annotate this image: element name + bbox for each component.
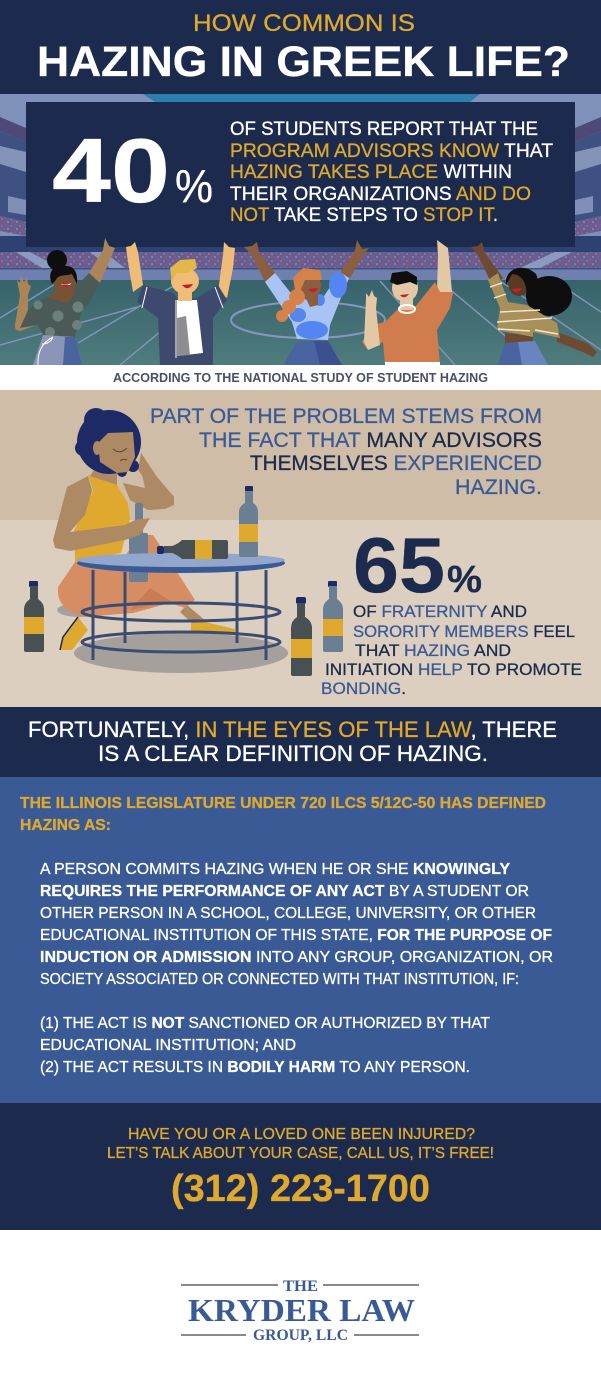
banner: definition heading: FORTUNATELY, IN THE EYES OF THE LAW, THERE bbox=[28, 717, 557, 742]
definition text: SOCIETY ASSOCIATED OR CONNECTED WITH THAT INSTITUTION, IF: bbox=[40, 971, 519, 988]
header banner bbox=[0, 0, 601, 92]
bonding statistic text: INITIATION HELP TO PROMOTE bbox=[325, 660, 582, 679]
banner: definition heading bbox=[0, 707, 601, 777]
definition text: REQUIRES THE PERFORMANCE OF ANY ACT BY A STUDENT OR bbox=[40, 883, 529, 900]
advisors text bbox=[150, 405, 542, 499]
big number 40 percent bbox=[52, 121, 213, 222]
phone number: (312) 223-1700 bbox=[171, 1168, 430, 1210]
statute heading bbox=[20, 795, 546, 834]
definition text bbox=[40, 861, 553, 1076]
bottle: floor right bbox=[323, 581, 343, 652]
source caption bbox=[0, 365, 601, 390]
big number 65 percent: % bbox=[447, 559, 482, 601]
panel: 40 percent statistic bbox=[26, 102, 575, 247]
illustration: woman at table with bottles bbox=[24, 408, 343, 676]
person: woman in striped top bbox=[471, 242, 597, 365]
statistic text: HAZING TAKES PLACE WITHIN bbox=[230, 161, 512, 183]
call to action text: HAVE YOU OR A LOVED ONE BEEN INJURED? bbox=[128, 1126, 475, 1143]
bonding statistic text: SORORITY MEMBERS FEEL bbox=[353, 622, 575, 641]
bonding statistic text: THAT HAZING AND bbox=[355, 641, 511, 660]
panel: stadium hero bbox=[0, 92, 601, 365]
definition text: A PERSON COMMITS HAZING WHEN HE OR SHE KNOWINGLY bbox=[40, 861, 510, 878]
statute heading: HAZING AS: bbox=[20, 817, 111, 834]
definition text: (2) THE ACT RESULTS IN BODILY HARM TO ANY PERSON. bbox=[40, 1059, 470, 1076]
logo: The Kryder Law Group bbox=[0, 1230, 601, 1389]
person: man in orange shirt bbox=[362, 240, 453, 365]
panel: legal definition bbox=[0, 777, 601, 1103]
bottle: floor front bbox=[291, 597, 312, 676]
call to action text: LET’S TALK ABOUT YOUR CASE, CALL US, IT’S FREE! bbox=[107, 1145, 494, 1162]
advisors text: PART OF THE PROBLEM STEMS FROM bbox=[150, 405, 542, 428]
table top bbox=[77, 553, 285, 573]
advisors text: THEMSELVES EXPERIENCED bbox=[250, 452, 542, 475]
bottle: on table lying bbox=[157, 540, 228, 559]
stadium background bbox=[0, 92, 601, 365]
big number 65 percent bbox=[353, 521, 482, 609]
logo: The Kryder Law Group: KRYDER LAW bbox=[188, 1292, 415, 1328]
big number 40 percent: % bbox=[175, 160, 213, 212]
definition text: EDUCATIONAL INSTITUTION; AND bbox=[40, 1037, 296, 1054]
bonding statistic text: OF FRATERNITY AND bbox=[353, 602, 527, 621]
bonding statistic text: BONDING. bbox=[321, 679, 406, 698]
statistic text: THEIR ORGANIZATIONS AND DO bbox=[230, 183, 531, 205]
advisors text: HAZING. bbox=[455, 476, 542, 499]
statistic text: NOT TAKE STEPS TO STOP IT. bbox=[230, 204, 498, 226]
definition text: EDUCATIONAL INSTITUTION OF THIS STATE, FOR THE PURPOSE OF bbox=[40, 927, 552, 944]
call to action text bbox=[107, 1126, 494, 1162]
person: blond man in jacket bbox=[126, 242, 235, 365]
panel: call to action bbox=[0, 1103, 601, 1230]
source caption: ACCORDING TO THE NATIONAL STUDY OF STUDENT HAZING bbox=[113, 371, 488, 385]
big number 65 percent: 65 bbox=[353, 521, 445, 609]
advisors text: THE FACT THAT MANY ADVISORS bbox=[199, 429, 542, 452]
person: woman in blue top bbox=[244, 240, 369, 365]
woman bbox=[53, 408, 235, 650]
main title: HAZING IN GREEK LIFE? bbox=[37, 38, 570, 86]
person: woman in polka dot top bbox=[15, 238, 115, 365]
logo: The Kryder Law Group: THE bbox=[283, 1278, 318, 1295]
title kicker: HOW COMMON IS bbox=[193, 10, 415, 37]
big number 40 percent: 40 bbox=[52, 121, 170, 222]
statistic text bbox=[230, 118, 553, 226]
definition text: OTHER PERSON IN A SCHOOL, COLLEGE, UNIVERSITY, OR OTHER bbox=[40, 905, 536, 922]
table frame bbox=[82, 570, 280, 660]
statute heading: THE ILLINOIS LEGISLATURE UNDER 720 ILCS 5/12C-50 HAS DEFINED bbox=[20, 795, 546, 812]
definition text: INDUCTION OR ADMISSION INTO ANY GROUP, ORGANIZATION, OR bbox=[40, 949, 553, 966]
banner: definition heading: IS A CLEAR DEFINITION OF HAZING. bbox=[98, 741, 488, 766]
bonding statistic text bbox=[321, 602, 582, 698]
definition text: (1) THE ACT IS NOT SANCTIONED OR AUTHORIZED BY THAT bbox=[40, 1015, 490, 1032]
logo: The Kryder Law Group: GROUP, LLC bbox=[253, 1327, 348, 1344]
panel: advisors and bonding bbox=[0, 390, 601, 707]
statistic text: PROGRAM ADVISORS KNOW THAT bbox=[230, 140, 553, 162]
statistic text: OF STUDENTS REPORT THAT THE bbox=[230, 118, 538, 140]
bottle: on table standing bbox=[239, 486, 258, 557]
bottle: floor left bbox=[24, 581, 44, 652]
